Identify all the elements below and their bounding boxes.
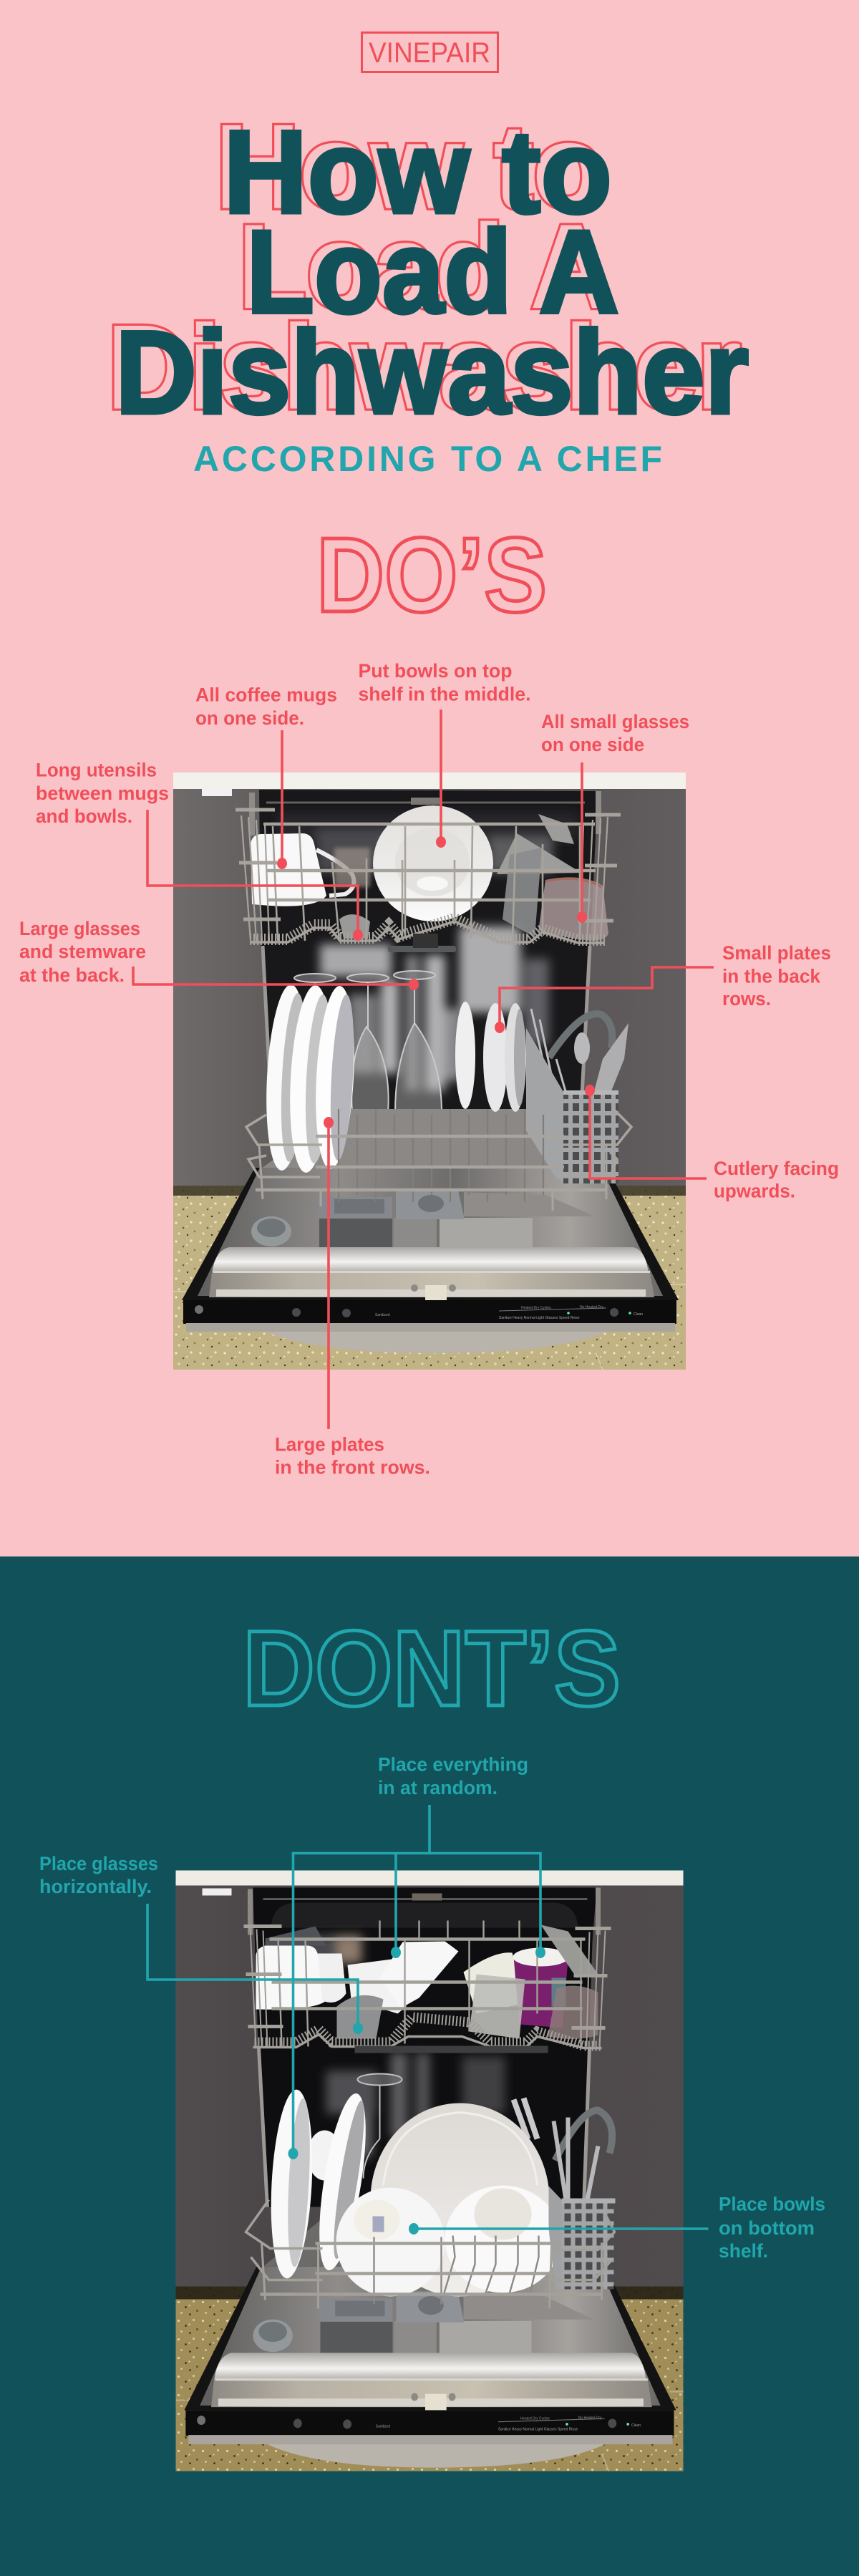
callout: place glasses horizontally <box>39 1853 363 2034</box>
title outline red band: How to <box>215 100 604 232</box>
callout: coffee mugs: on one side. <box>195 707 304 729</box>
callout: large glasses: at the back. <box>19 964 125 986</box>
large plates in front rows <box>262 984 359 1173</box>
plate behind <box>308 2131 342 2181</box>
large plate leaning <box>371 2103 550 2297</box>
title outline inner knockout <box>107 100 741 432</box>
callout: small plates: Small plates <box>722 942 831 964</box>
callout: cutlery: Cutlery facing <box>714 1158 839 1179</box>
callout: small glasses <box>541 711 689 923</box>
callout: place bowls on bottom shelf: Place bowls <box>719 2194 825 2215</box>
title solid layer <box>115 106 749 438</box>
title outline inner knockout: How to <box>215 100 604 232</box>
title solid layer: Dishwasher <box>115 306 749 438</box>
cutlery and basket <box>526 1009 629 1183</box>
title outline red band: Dishwasher <box>107 301 741 432</box>
callout: large glasses: Large glasses <box>19 918 140 939</box>
lower rack wires <box>246 2199 614 2308</box>
callout: small plates: in the back <box>722 965 821 987</box>
lower rack floor <box>259 1109 603 1170</box>
callout: long utensils <box>36 759 363 941</box>
wine glass <box>358 2073 402 2178</box>
title outline inner knockout: Dishwasher <box>107 301 741 432</box>
callout: place everything at random: Place everything <box>378 1754 528 1776</box>
bowl front right <box>445 2185 561 2292</box>
top rack wires <box>236 810 621 943</box>
plate left <box>267 2088 316 2280</box>
title outline red band <box>107 100 741 432</box>
callout: cutlery: upwards. <box>714 1180 795 1201</box>
mug left <box>256 1945 328 2010</box>
callout: long utensils: between mugs <box>36 783 169 804</box>
title outline inner knockout: Load A <box>238 200 611 332</box>
subtitle: ACCORDING TO A CHEF <box>193 439 662 479</box>
white bowl tipped <box>348 1957 407 2013</box>
spray arm <box>388 946 456 952</box>
pink background panel <box>0 0 859 1556</box>
top rack dishes <box>251 805 608 941</box>
callout: put bowls on top shelf: shelf in the middle. <box>358 683 531 704</box>
callout: put bowls on top shelf: Put bowls on top <box>358 660 513 682</box>
small plates in back rows <box>455 1002 526 1112</box>
top rack dishes <box>256 1924 598 2039</box>
title <box>107 100 749 438</box>
callout: small plates <box>495 942 831 1033</box>
photo: correctly loaded dishwasher <box>173 773 686 1370</box>
callout: long utensils: Long utensils <box>36 759 157 780</box>
large plate rim <box>384 2112 537 2185</box>
heading: Do's: DO’S <box>316 516 547 634</box>
coffee mug <box>251 833 326 906</box>
callout: cutlery <box>585 1085 839 1201</box>
pink glass <box>548 1986 598 2039</box>
callout: large plates: Large plates <box>275 1433 384 1455</box>
callout: large plates <box>275 1117 430 1478</box>
lower rack wires <box>246 1109 631 1211</box>
callout: place bowls on bottom shelf: on bottom <box>719 2217 815 2239</box>
callout: place bowls on bottom shelf: shelf. <box>719 2240 768 2262</box>
callout: large plates: in the front rows. <box>275 1457 430 1478</box>
heading: Don'ts: DONT’S <box>243 1608 621 1728</box>
small glasses <box>538 877 608 941</box>
dark teal background panel <box>0 1556 859 2576</box>
photo: badly loaded dishwasher <box>176 1870 683 2471</box>
callout: long utensils: and bowls. <box>36 805 132 827</box>
callout: coffee mugs: All coffee mugs <box>195 684 337 706</box>
callout: small glasses: on one side <box>541 734 644 755</box>
lower rack floor <box>262 2207 606 2268</box>
callout: coffee mugs <box>195 684 337 869</box>
callout: put bowls on top shelf <box>358 660 531 848</box>
cutlery basket <box>548 2111 616 2290</box>
callout: small plates: rows. <box>722 988 771 1009</box>
dishwasher door <box>184 2267 676 2468</box>
dishwasher door <box>182 1168 679 1353</box>
callout: place glasses horizontally: horizontally. <box>39 1876 152 1897</box>
plate second <box>310 2091 375 2273</box>
utensils behind big plate <box>514 2098 537 2139</box>
callout: place bowls on bottom shelf <box>409 2194 825 2262</box>
callout: small glasses: All small glasses <box>541 711 689 732</box>
crystal glass <box>470 1975 525 2039</box>
purple mug <box>514 1956 568 2028</box>
bowl on top shelf <box>373 805 493 921</box>
callout: large glasses <box>19 918 419 990</box>
callout: place everything at random <box>288 1754 545 2159</box>
top rack wires <box>243 1920 611 2048</box>
jug <box>464 1952 527 2013</box>
wine glasses <box>294 971 442 1113</box>
callout: large glasses: and stemware <box>19 941 146 962</box>
logo: VinePair: VINEPAIR <box>369 37 490 69</box>
title solid layer: Load A <box>246 206 619 338</box>
callout: place everything at random: in at random. <box>378 1777 498 1798</box>
title outline red band: Load A <box>238 200 611 332</box>
bowl front left <box>336 2188 445 2297</box>
callout: place glasses horizontally: Place glasses <box>39 1853 158 1874</box>
title solid layer: How to <box>223 106 612 238</box>
